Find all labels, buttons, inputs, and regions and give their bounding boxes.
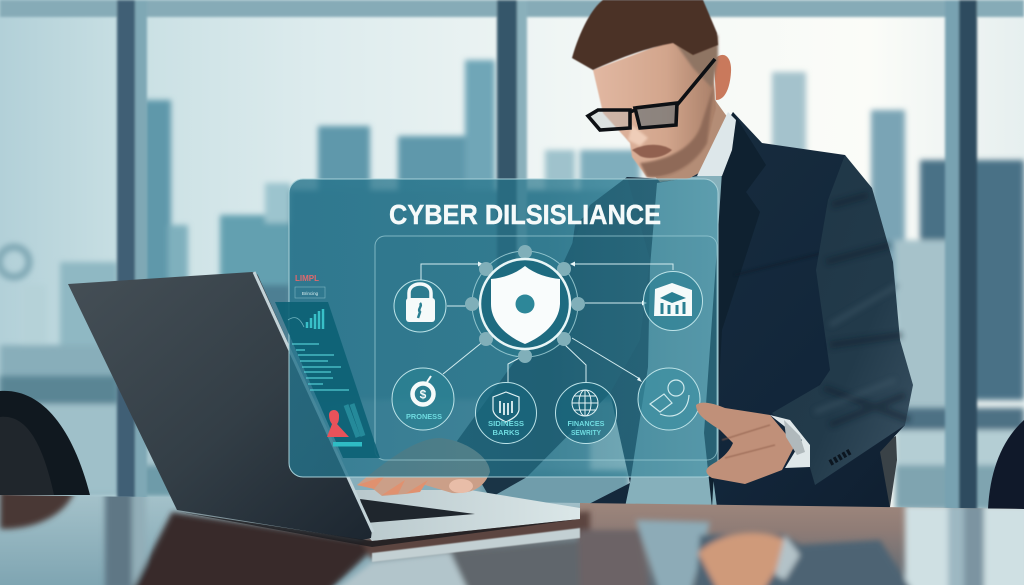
lapel notch shadow xyxy=(735,250,835,275)
shield keyhole xyxy=(516,294,534,314)
label: SIDINESS xyxy=(488,419,524,428)
line chart xyxy=(288,318,304,327)
node: building xyxy=(644,272,702,330)
title: CYBER DILSISLIANCE xyxy=(389,199,661,230)
teal bar xyxy=(333,442,362,446)
hand on keyboard xyxy=(357,438,490,496)
label: FINANCES xyxy=(568,419,604,428)
panel: translucent holographic interface xyxy=(275,179,718,477)
label: PRONESS xyxy=(406,412,442,421)
side bars xyxy=(346,404,363,437)
arrowheads xyxy=(478,262,647,382)
icon: padlock xyxy=(406,284,435,322)
node: business banks xyxy=(476,382,536,444)
red person figure xyxy=(327,410,349,437)
laptop lid xyxy=(68,272,372,540)
businessman xyxy=(457,0,913,508)
text lines xyxy=(292,344,349,390)
laptop base xyxy=(355,490,580,541)
laptop reflection band xyxy=(372,528,580,562)
side hair fade xyxy=(673,35,718,88)
small badge xyxy=(295,274,325,298)
node: finances security xyxy=(556,382,616,444)
node: finances security: SEWRITY xyxy=(571,428,601,437)
right sleeve fold highlights xyxy=(824,195,910,425)
small badge: LIMPL xyxy=(295,274,319,283)
nose shadow xyxy=(628,125,648,146)
arm to keyboard xyxy=(457,177,650,498)
node: business banks: BARKS xyxy=(492,428,520,437)
collar xyxy=(697,112,736,176)
right hand pointing at panel xyxy=(696,403,810,484)
moustache and mouth xyxy=(632,145,672,158)
wristwatch xyxy=(784,420,805,455)
central shield node xyxy=(465,245,585,363)
node: lock xyxy=(394,280,446,332)
inner frame xyxy=(375,236,717,460)
table reflections xyxy=(0,490,1024,585)
shirt cuff xyxy=(770,415,810,468)
icon: money drop: $ xyxy=(420,388,427,402)
laptop screen data panel xyxy=(275,302,380,458)
neck xyxy=(640,100,728,182)
small badge: Brincing xyxy=(302,291,319,296)
connectors xyxy=(421,264,673,382)
ear xyxy=(714,55,731,100)
table xyxy=(0,490,1024,585)
finger shading xyxy=(722,425,775,458)
right sleeve xyxy=(772,155,913,485)
icon: shield xyxy=(491,266,560,344)
node: protection hand xyxy=(638,368,700,430)
bar chart xyxy=(307,309,323,329)
icon: shield bank xyxy=(493,392,519,422)
shirt xyxy=(625,172,722,507)
icon: globe xyxy=(572,390,598,416)
office chair right xyxy=(866,420,1024,509)
glasses xyxy=(588,59,715,130)
jacket buttons xyxy=(830,451,851,463)
mid-level window ledge xyxy=(0,247,1024,510)
icon: hand with badge xyxy=(650,380,689,416)
left lapel xyxy=(704,112,766,508)
keyboard xyxy=(360,499,475,523)
face xyxy=(593,40,716,177)
beard shade xyxy=(640,85,714,177)
suit jacket xyxy=(560,112,905,508)
icon: building xyxy=(654,283,692,316)
office chair left xyxy=(0,391,90,495)
base shadow xyxy=(180,512,580,547)
lid edge highlight xyxy=(254,272,373,532)
laptop xyxy=(68,272,580,547)
hair xyxy=(572,0,718,70)
node: progress xyxy=(392,368,454,430)
